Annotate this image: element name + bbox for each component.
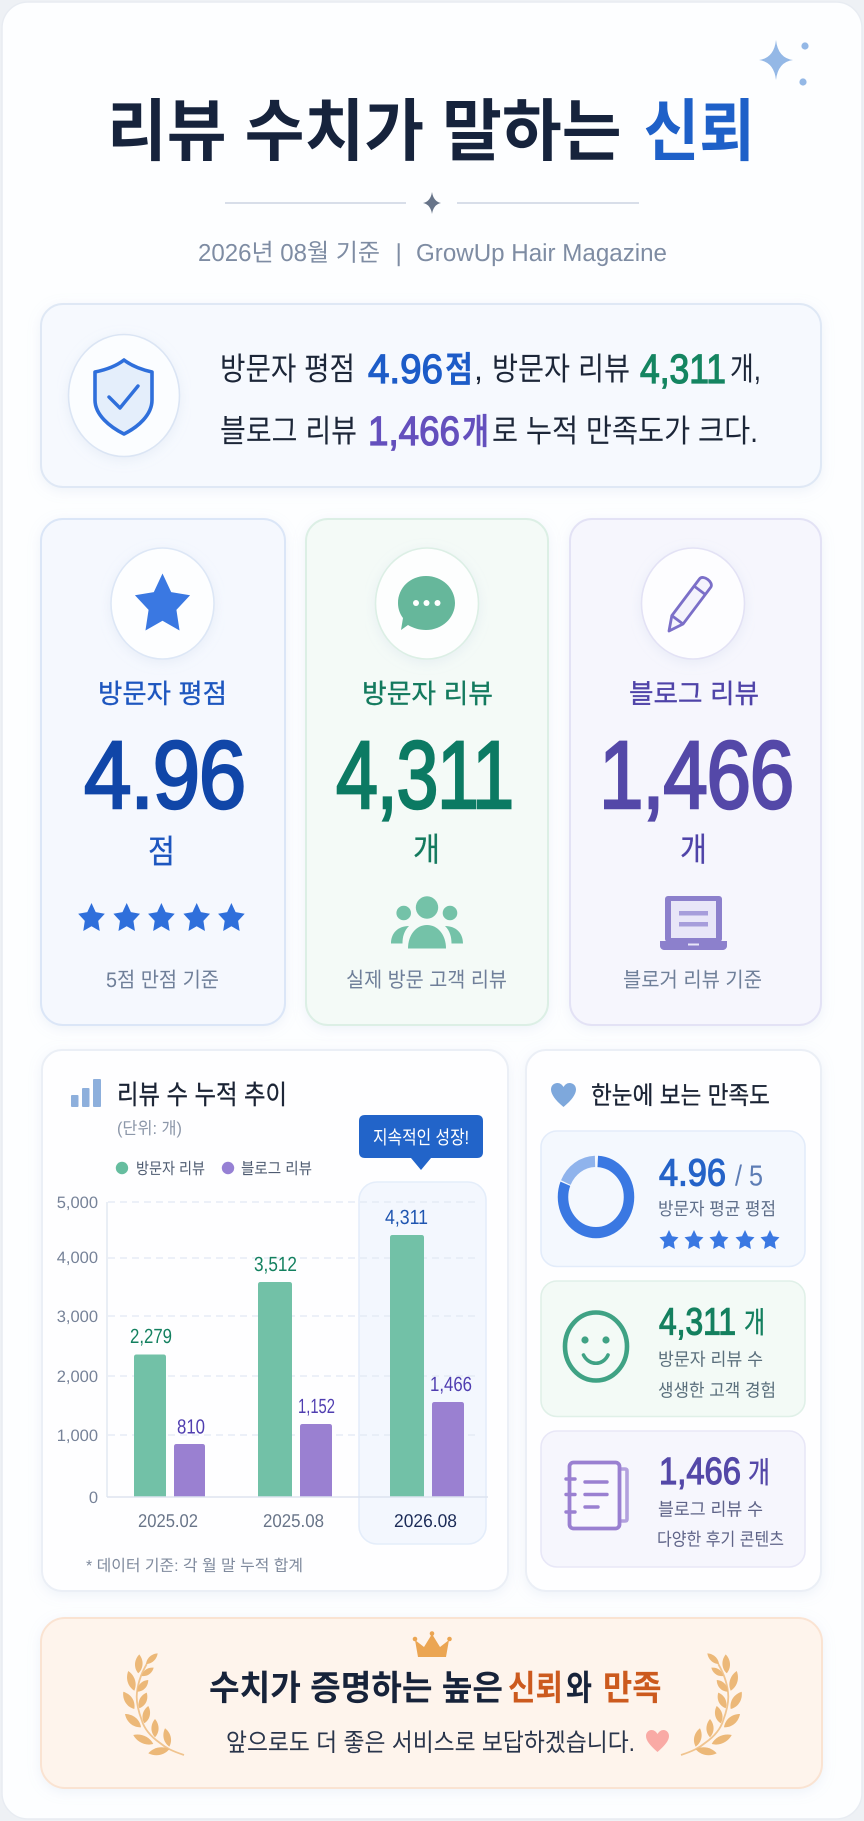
icon: decorative sparkle <box>759 40 809 86</box>
icon: people <box>391 896 463 948</box>
summary text: 로 누적 만족도가 크다. <box>492 413 758 449</box>
x axis labels: 2025.02 <box>138 1510 198 1531</box>
card label: 방문자 평점 <box>98 679 227 709</box>
banner heading <box>209 1669 662 1708</box>
highlight column <box>359 1182 486 1544</box>
icon: bars <box>71 1079 101 1107</box>
y axis labels: 2,000 <box>57 1368 98 1386</box>
value labels: 1,152 <box>298 1395 335 1418</box>
value labels <box>130 1206 472 1438</box>
big number: 4.96 <box>84 722 245 829</box>
summary text: 블로그 리뷰 <box>220 413 357 449</box>
blog caption: 블로그 리뷰 수 <box>658 1500 763 1520</box>
summary text: 개, <box>730 351 761 387</box>
subtitle: GrowUp Hair Magazine <box>416 240 667 267</box>
review value: 개 <box>744 1307 765 1340</box>
rating value: 4.96 <box>659 1152 726 1194</box>
card caption: 5점 만점 기준 <box>106 969 219 992</box>
value labels: 2,279 <box>130 1325 172 1348</box>
icon: speech bubble <box>376 548 478 659</box>
y axis labels: 4,000 <box>57 1249 98 1267</box>
x axis labels: 2026.08 <box>394 1510 457 1531</box>
card label: 방문자 리뷰 <box>362 679 493 709</box>
review caption: 생생한 고객 경험 <box>658 1380 776 1400</box>
legend: 블로그 리뷰 <box>241 1160 312 1178</box>
summary text: 방문자 리뷰 <box>492 351 630 387</box>
icon: small heart <box>646 1730 669 1752</box>
x axis labels: 2025.08 <box>263 1510 324 1531</box>
chart title: 리뷰 수 누적 추이 <box>117 1080 287 1110</box>
banner heading: 만족 <box>603 1669 662 1708</box>
unit: 개 <box>413 831 440 868</box>
x axis labels <box>138 1510 457 1531</box>
panel: visitor rating card <box>41 519 285 1025</box>
panel: closing banner <box>41 1618 822 1788</box>
summary text: 4.96 <box>368 346 443 392</box>
subtitle <box>198 240 667 267</box>
banner heading: 신뢰 <box>508 1669 563 1708</box>
y axis labels <box>57 1194 98 1507</box>
value labels: 4,311 <box>385 1206 428 1229</box>
icon: star badge <box>111 548 214 659</box>
icon: crown <box>413 1631 452 1657</box>
icon: right laurel <box>681 1651 745 1757</box>
y axis labels: 3,000 <box>57 1308 98 1326</box>
banner subtext: 앞으로도 더 좋은 서비스로 보답하겠습니다. <box>226 1729 635 1757</box>
icon: donut <box>563 1161 629 1233</box>
y axis labels: 0 <box>89 1489 98 1507</box>
unit: 점 <box>148 833 175 870</box>
summary text <box>220 346 761 454</box>
panel: visitor review card <box>306 519 548 1025</box>
big number: 1,466 <box>599 722 793 829</box>
icon: pencil <box>642 548 744 659</box>
value labels: 3,512 <box>254 1253 297 1276</box>
panel: blog review card <box>570 519 821 1025</box>
footnote: * 데이터 기준: 각 월 말 누적 합계 <box>86 1557 303 1575</box>
panel: cumulative review chart <box>42 1050 508 1591</box>
rating value: / 5 <box>735 1160 763 1192</box>
summary text: , <box>474 351 483 387</box>
title: 리뷰 수치가 말하는 <box>107 94 622 170</box>
icon: notebook <box>566 1462 627 1528</box>
icon: left laurel <box>120 1651 184 1757</box>
blog value: 1,466 <box>659 1451 741 1493</box>
summary text: 4,311 <box>640 346 726 392</box>
blog value: 개 <box>748 1457 770 1490</box>
title divider <box>225 192 639 214</box>
icon: five stars <box>78 903 245 931</box>
bar chart <box>57 1194 488 1531</box>
blog caption: 다양한 후기 콘텐츠 <box>657 1530 784 1550</box>
subtitle: | <box>396 240 402 267</box>
panel title: 한눈에 보는 만족도 <box>591 1082 770 1110</box>
icon: stars <box>659 1230 780 1249</box>
sub-panel: visitor reviews <box>541 1281 805 1416</box>
callout <box>359 1115 483 1170</box>
review caption: 방문자 리뷰 수 <box>658 1350 763 1370</box>
panel: summary <box>41 304 821 487</box>
y axis labels: 5,000 <box>57 1194 98 1212</box>
title: 신뢰 <box>644 94 755 170</box>
summary text: 점 <box>445 349 473 390</box>
sub-panel: rating <box>541 1131 805 1266</box>
banner heading: 와 <box>566 1669 592 1708</box>
subtitle: 2026년 08월 기준 <box>198 240 380 267</box>
summary text: 1,466 <box>368 408 460 454</box>
callout: 지속적인 성장! <box>373 1128 469 1149</box>
y axis labels: 1,000 <box>57 1427 98 1445</box>
bars <box>134 1235 464 1497</box>
summary text: 개 <box>462 411 489 452</box>
icon: heart <box>551 1083 576 1107</box>
blog caption <box>657 1500 784 1550</box>
value labels: 1,466 <box>430 1373 472 1396</box>
panel: satisfaction at a glance <box>526 1050 821 1591</box>
legend: 방문자 리뷰 <box>136 1160 205 1178</box>
unit: 개 <box>680 831 707 868</box>
card caption: 블로거 리뷰 기준 <box>623 969 762 992</box>
rating caption: 방문자 평균 평점 <box>658 1199 776 1219</box>
unit note: (단위: 개) <box>117 1119 182 1138</box>
banner heading: 수치가 증명하는 높은 <box>209 1669 503 1708</box>
sub-panel: blog reviews <box>541 1431 805 1567</box>
card caption: 실제 방문 고객 리뷰 <box>346 969 507 992</box>
icon: laptop <box>660 896 727 950</box>
icon: shield with check <box>68 334 180 456</box>
summary text: 방문자 평점 <box>220 351 355 387</box>
review caption <box>658 1350 776 1400</box>
value labels: 810 <box>177 1416 205 1438</box>
big number: 4,311 <box>336 722 513 829</box>
legend <box>116 1160 312 1178</box>
card label: 블로그 리뷰 <box>629 679 759 709</box>
review value: 4,311 <box>659 1302 736 1344</box>
icon: smiley <box>565 1312 627 1380</box>
